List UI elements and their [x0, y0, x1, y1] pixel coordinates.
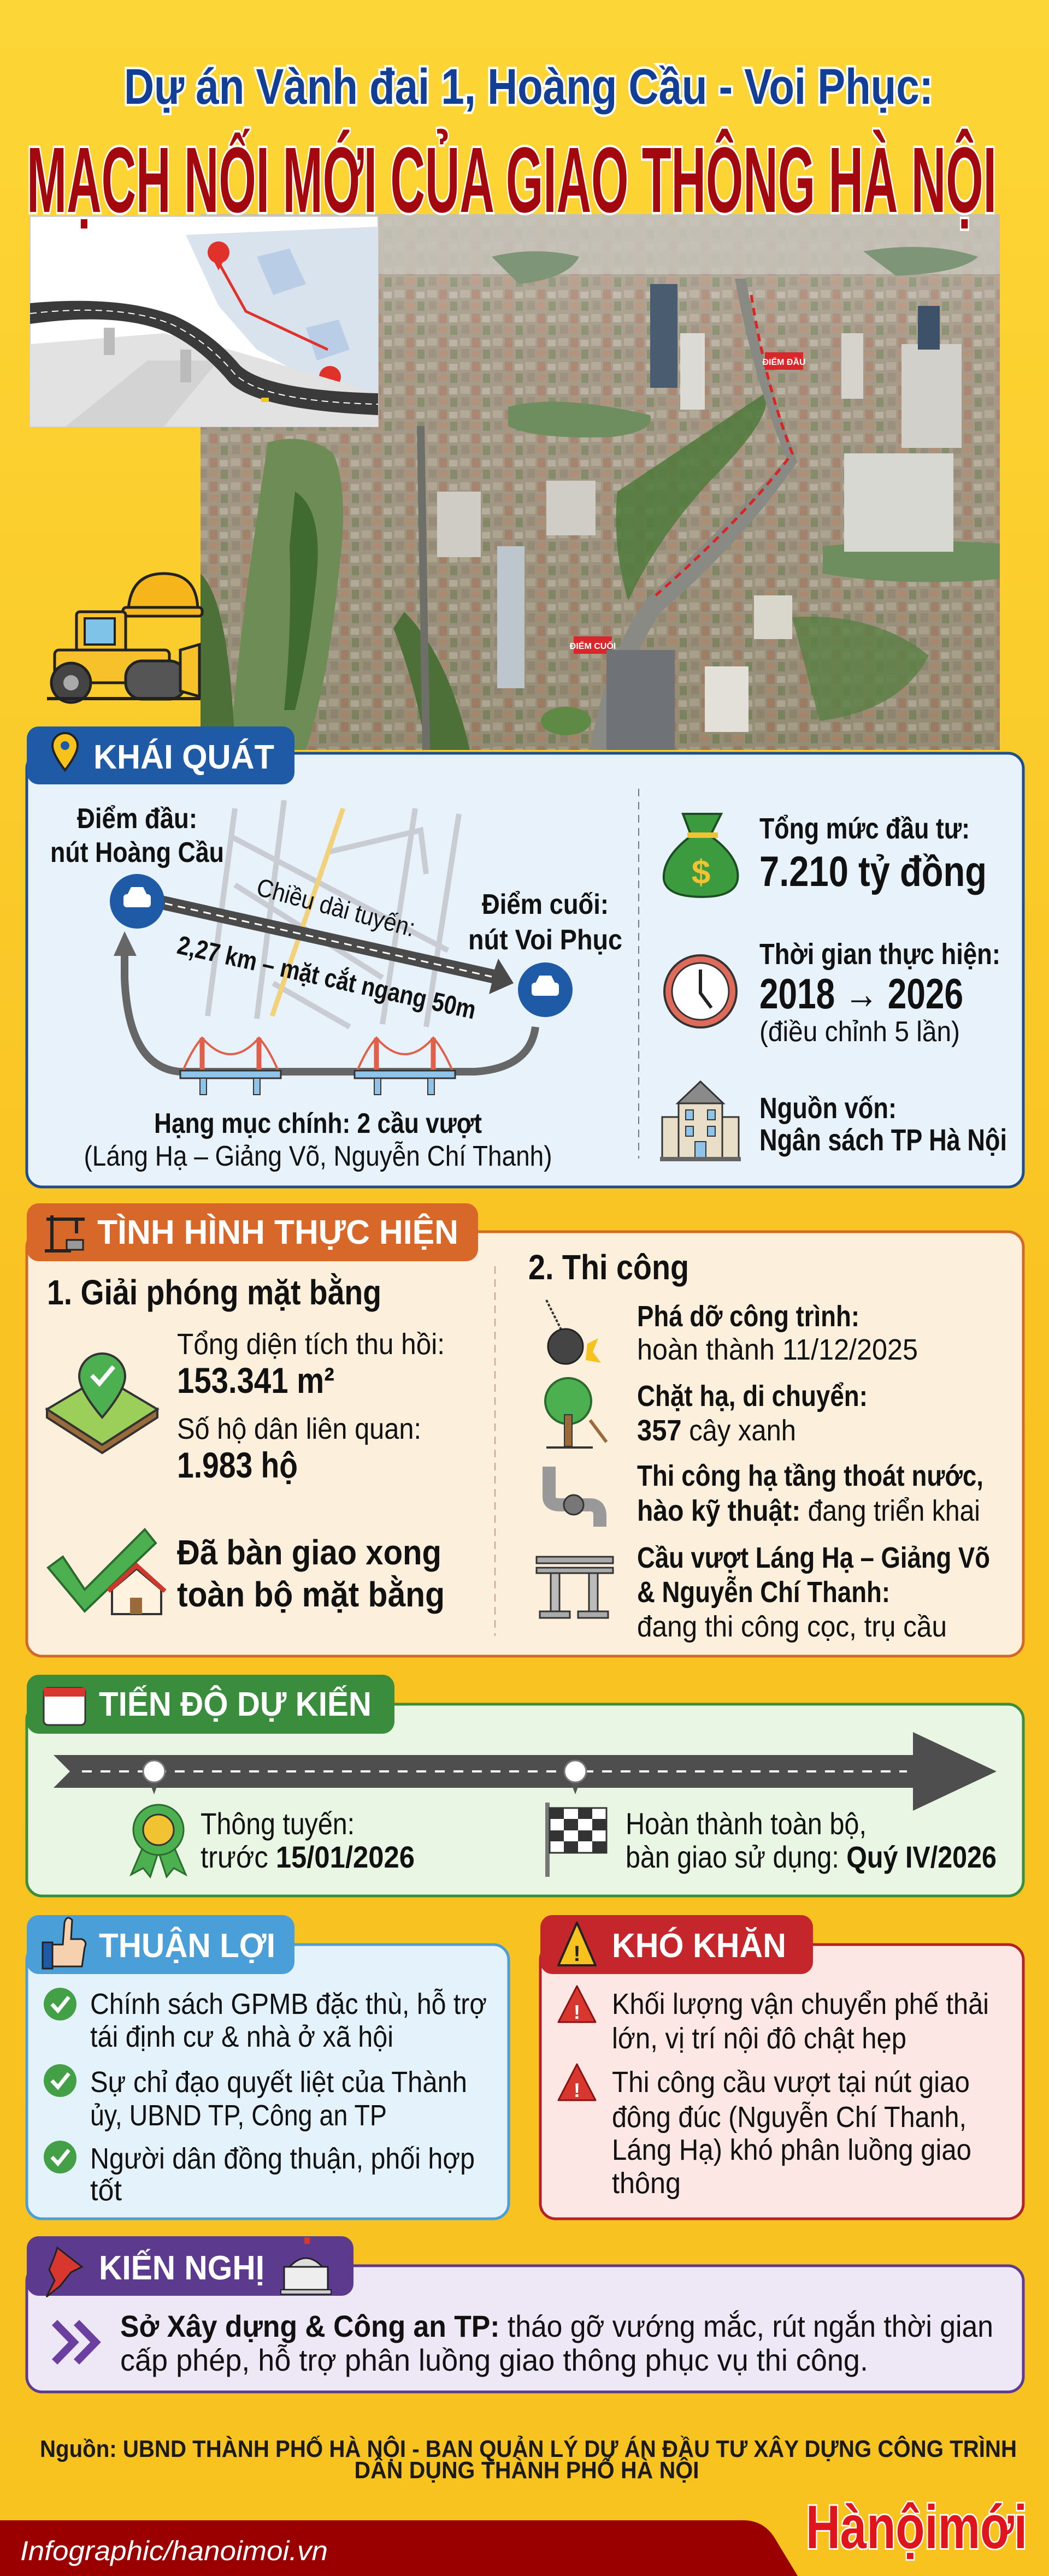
list: khó khăn: [558, 1986, 989, 2200]
stat: timeline: (điều chỉnh 5 lần): [759, 1016, 960, 1048]
section: giải phóng mặt bằng: toàn bộ mặt bằng: [177, 1575, 445, 1614]
tab: thuận lợi: THUẬN LỢI: [99, 1927, 275, 1965]
route diagram: Điểm cuối:: [482, 889, 609, 920]
aerial photo: [201, 214, 1000, 750]
recommendation text: Sở Xây dựng & Công an TP: tháo gỡ vướng mắc, rút ngắn thời gian: [120, 2309, 993, 2343]
section: thi công: đang thi công cọc, trụ cầu: [637, 1610, 947, 1643]
route diagram: 2,27 km – mặt cắt ngang 50m: [175, 930, 479, 1025]
panel: tình hình thực hiện: [27, 1203, 1023, 1656]
aerial photo: ĐIỂM ĐẦU: [762, 357, 806, 367]
route diagram: Hạng mục chính: 2 cầu vượt: [154, 1108, 482, 1139]
list: khó khăn: Láng Hạ) khó phân luồng giao: [612, 2134, 971, 2166]
stat: investment: Tổng mức đầu tư:: [759, 812, 970, 845]
stat: timeline: Thời gian thực hiện:: [759, 938, 1000, 971]
source note: [40, 2435, 1017, 2484]
tab: tiến độ: TIẾN ĐỘ DỰ KIẾN: [99, 1686, 372, 1723]
section: thi công: & Nguyễn Chí Thanh:: [637, 1576, 890, 1609]
list: thuận lợi: Chính sách GPMB đặc thù, hỗ trợ: [90, 1988, 487, 2020]
stat: funding: Nguồn vốn:: [759, 1092, 897, 1125]
stat: funding: [660, 1082, 1007, 1161]
list: thuận lợi: tái định cư & nhà ở xã hội: [90, 2020, 393, 2053]
tab: khó khăn: [540, 1915, 813, 1974]
aerial photo: ĐIỂM CUỐI: [570, 640, 616, 651]
section: thi công: Cầu vượt Láng Hạ – Giảng Võ: [637, 1541, 990, 1574]
stat: timeline: [664, 938, 1000, 1048]
icon: road roller and helmet: [47, 574, 202, 702]
map inset: [30, 216, 378, 427]
title: [27, 59, 997, 232]
section: giải phóng mặt bằng: 1. Giải phóng mặt bằng: [47, 1273, 381, 1312]
milestone: thông tuyến: trước 15/01/2026: [201, 1840, 415, 1874]
timeline arrow: [54, 1732, 997, 1811]
milestone: hoàn thành: Hoàn thành toàn bộ,: [626, 1806, 867, 1841]
tab: kiến nghị: KIẾN NGHỊ: [99, 2249, 264, 2287]
tab: khái quát: KHÁI QUÁT: [93, 738, 274, 776]
route diagram: (Láng Hạ – Giảng Võ, Nguyễn Chí Thanh): [84, 1141, 552, 1172]
panel: tiến độ dự kiến: [27, 1675, 1023, 1896]
milestone: hoàn thành: [545, 1803, 997, 1877]
footer band: [0, 2520, 798, 2576]
footer band: Infographic/hanoimoi.vn: [20, 2536, 328, 2566]
stat: investment: [664, 812, 987, 897]
tab: tiến độ: [27, 1675, 394, 1734]
tab: thuận lợi: [27, 1915, 294, 1974]
route diagram: Điểm đầu:: [77, 803, 197, 835]
section: thi công: Thi công hạ tầng thoát nước,: [637, 1460, 983, 1492]
recommendation text: [55, 2309, 993, 2377]
route diagram: nút Hoàng Cầu: [50, 837, 224, 868]
milestone: thông tuyến: [131, 1805, 415, 1877]
list: khó khăn: thông: [612, 2167, 681, 2200]
section: giải phóng mặt bằng: 1.983 hộ: [177, 1445, 298, 1485]
recommendation text: cấp phép, hỗ trợ phân luồng giao thông phục vụ thi công.: [120, 2343, 868, 2377]
section: giải phóng mặt bằng: [47, 1273, 445, 1614]
stat: investment: $: [692, 854, 710, 891]
tab: khó khăn: KHÓ KHĂN: [612, 1927, 786, 1965]
tab: khó khăn: !: [573, 1942, 581, 1966]
section: giải phóng mặt bằng: 153.341 m²: [177, 1360, 334, 1401]
milestone: thông tuyến: Thông tuyến:: [201, 1806, 355, 1841]
route diagram: [50, 800, 622, 1172]
section: giải phóng mặt bằng: Đã bàn giao xong: [177, 1533, 441, 1572]
panel: thuận lợi: [27, 1915, 509, 2219]
list: thuận lợi: tốt: [90, 2174, 122, 2207]
list: thuận lợi: Sự chỉ đạo quyết liệt của Thành: [90, 2066, 467, 2099]
tab: tình hình thực hiện: [27, 1203, 478, 1261]
tab: kiến nghị: [27, 2236, 353, 2297]
list: khó khăn: Khối lượng vận chuyển phế thải: [612, 1988, 989, 2020]
milestone: hoàn thành: bàn giao sử dụng: Quý IV/2026: [626, 1840, 997, 1874]
section: giải phóng mặt bằng: Số hộ dân liên quan:: [177, 1413, 421, 1445]
list: khó khăn: Thi công cầu vượt tại nút giao: [612, 2066, 970, 2099]
section: thi công: 2. Thi công: [528, 1248, 689, 1287]
list: thuận lợi: [44, 1988, 487, 2207]
list: khó khăn: đông đúc (Nguyễn Chí Thanh,: [612, 2101, 967, 2134]
section: thi công: hào kỹ thuật: đang triển khai: [637, 1494, 980, 1527]
section: thi công: Chặt hạ, di chuyển:: [637, 1380, 868, 1413]
tab: tình hình thực hiện: TÌNH HÌNH THỰC HIỆN: [97, 1214, 458, 1251]
stat: investment: 7.210 tỷ đồng: [759, 847, 987, 895]
panel: kiến nghị: [27, 2236, 1023, 2392]
section: thi công: 357 cây xanh: [637, 1414, 796, 1447]
list: thuận lợi: Người dân đồng thuận, phối hợp: [90, 2142, 475, 2175]
panel: khó khăn: [540, 1915, 1023, 2219]
tab: khái quát: [27, 726, 294, 784]
stat: timeline: 2018 → 2026: [759, 970, 963, 1018]
section: giải phóng mặt bằng: Tổng diện tích thu hồi:: [177, 1328, 445, 1361]
panel: khái quát: [27, 726, 1023, 1187]
list: khó khăn: lớn, vị trí nội đô chật hẹp: [612, 2022, 906, 2055]
list: khó khăn: !: [574, 2001, 580, 2023]
route diagram: nút Voi Phục: [468, 924, 622, 956]
list: khó khăn: !: [574, 2079, 580, 2101]
route diagram: Chiều dài tuyến:: [254, 872, 419, 942]
source note: DÂN DỤNG THÀNH PHỐ HÀ NỘI: [354, 2456, 699, 2484]
section: thi công: Phá dỡ công trình:: [637, 1300, 859, 1333]
section: thi công: hoàn thành 11/12/2025: [637, 1333, 918, 1366]
section: thi công: [528, 1248, 990, 1643]
list: thuận lợi: ủy, UBND TP, Công an TP: [90, 2099, 387, 2132]
